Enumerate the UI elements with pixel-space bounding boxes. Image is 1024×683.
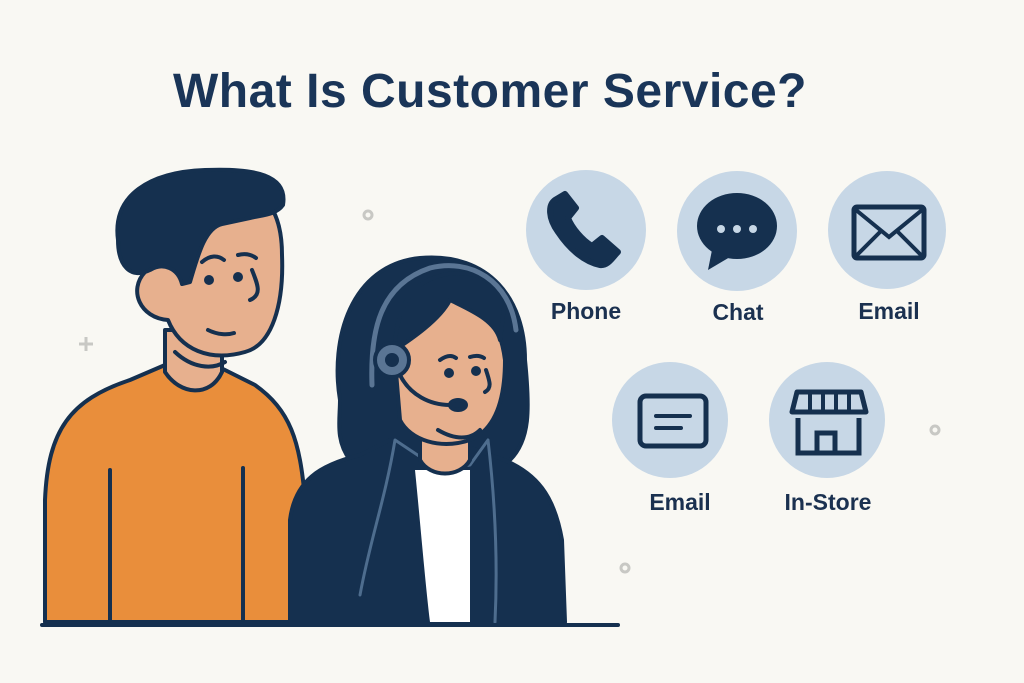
icon: email (828, 171, 946, 289)
icon: chat (677, 171, 797, 291)
label: chat: Chat (712, 299, 764, 325)
label: phone: Phone (551, 298, 621, 324)
icon: message card (612, 362, 728, 478)
title: What Is Customer Service? (173, 65, 807, 118)
person: man (45, 170, 305, 622)
label: email: Email (858, 298, 920, 324)
label: email 2: Email (649, 489, 711, 515)
label: in-store: In-Store (785, 489, 871, 515)
icon: store (769, 362, 885, 478)
person: agent (290, 257, 565, 622)
icon: phone (526, 170, 646, 290)
decorations (79, 211, 939, 572)
floor line (42, 623, 618, 627)
